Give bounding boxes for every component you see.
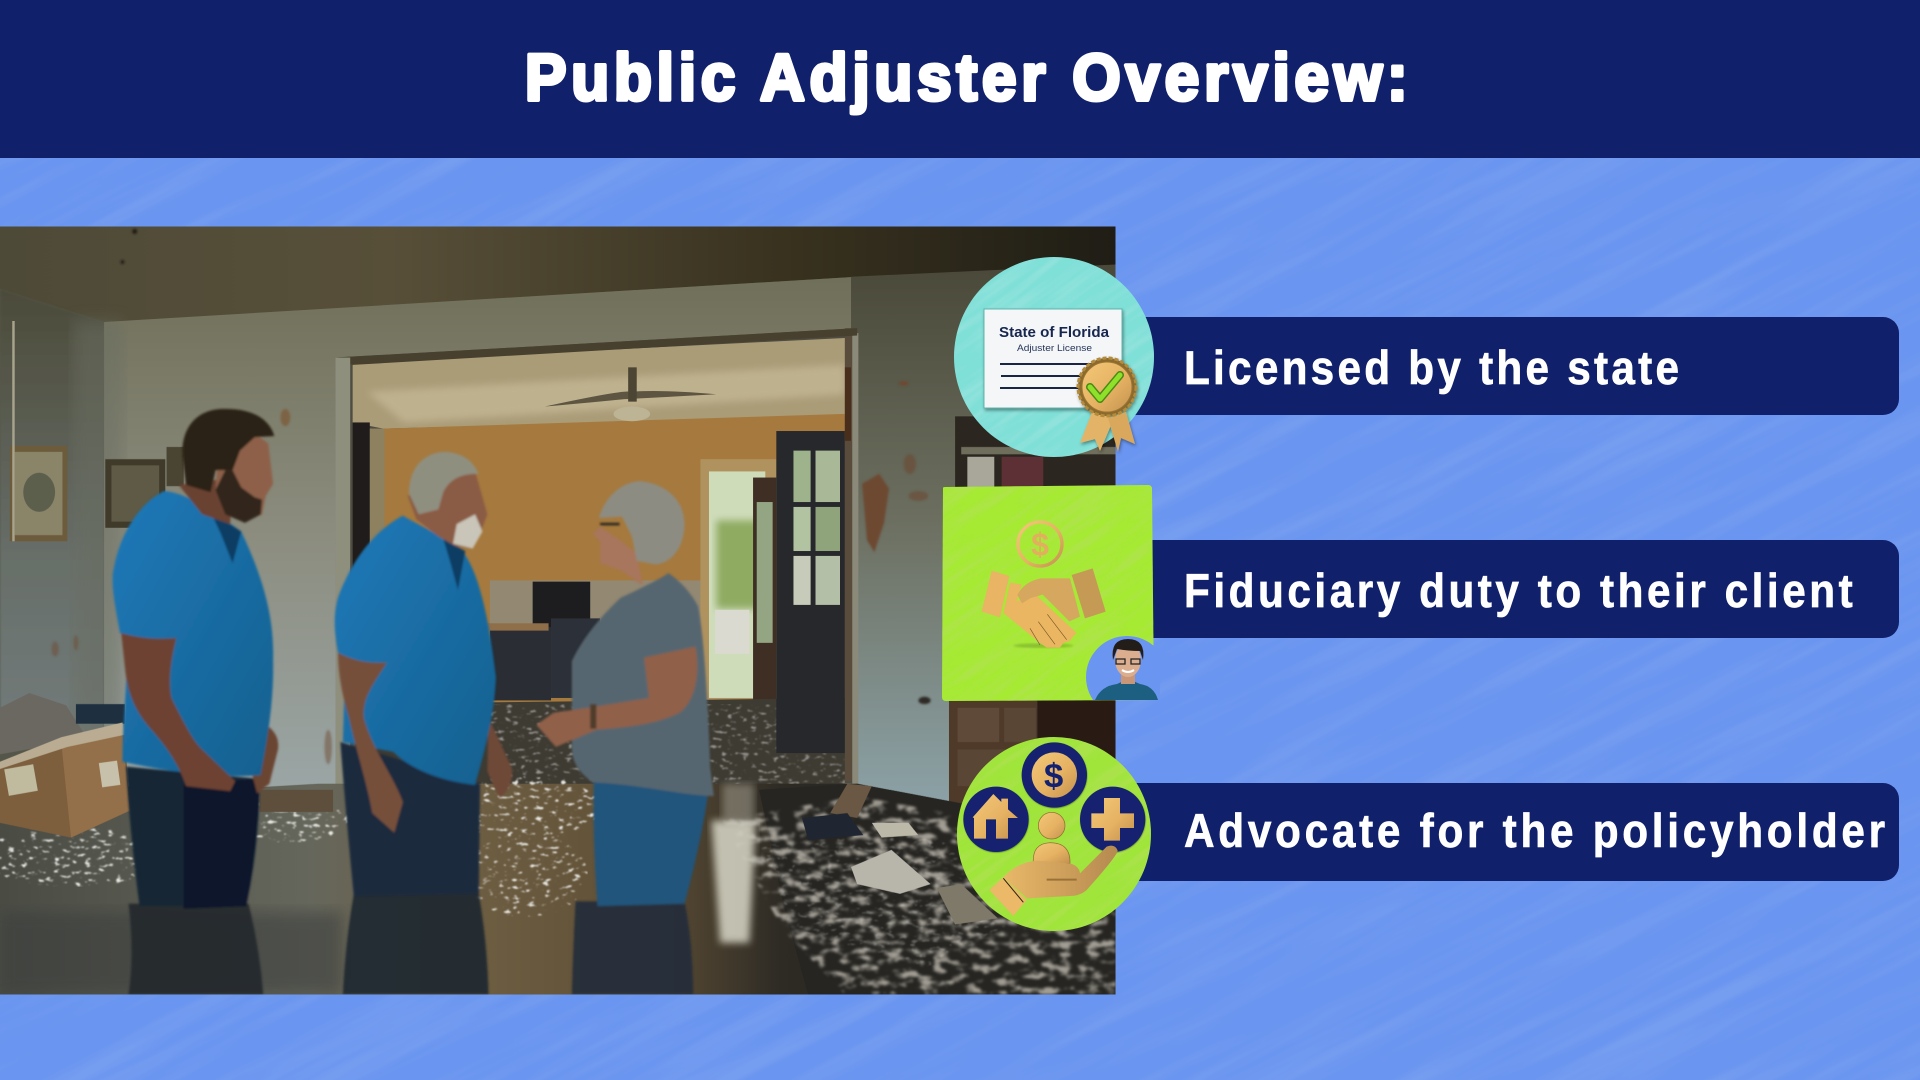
person and open hand	[989, 812, 1118, 916]
shirt	[113, 491, 273, 776]
icon: handshake on green card	[942, 485, 1160, 701]
ceiling fan	[545, 367, 716, 421]
license card: Adjuster License	[1017, 343, 1092, 354]
neck and face	[179, 478, 233, 524]
bar: Fiduciary duty to their client	[1150, 540, 1899, 638]
bookcase and dresser behind icons	[949, 416, 1116, 835]
icon: protecting home, money, health	[957, 737, 1151, 931]
bar: Licensed by the state	[1120, 317, 1899, 415]
debris bands	[0, 828, 136, 887]
shirt	[335, 516, 496, 785]
medical cross badge	[1080, 787, 1145, 852]
license card: State of Florida	[999, 324, 1110, 341]
house badge	[963, 787, 1029, 852]
icon: state license certificate	[954, 257, 1154, 457]
bar: Advocate for the policyholder	[1130, 783, 1899, 881]
bar: Advocate for the policyholder: Advocate for the policyholder	[1184, 806, 1885, 858]
dark door with glass panes	[336, 328, 858, 786]
arm	[338, 653, 403, 833]
advisor portrait	[1086, 636, 1160, 700]
gold seal with ribbons	[1078, 358, 1136, 452]
dollar coin badge	[1022, 742, 1087, 808]
man on left	[113, 409, 278, 994]
flooded floor	[0, 776, 1116, 994]
wall damage patches	[51, 229, 931, 764]
bar: Fiduciary duty to their client: Fiduciary duty to their client	[1184, 566, 1853, 618]
header band	[0, 0, 1920, 158]
handshake	[982, 568, 1106, 648]
arm	[536, 647, 697, 747]
title: Public Adjuster Overview:	[525, 40, 1408, 114]
coin with dollar sign: $	[1031, 526, 1049, 562]
room background	[0, 226, 1116, 801]
arm	[121, 633, 235, 791]
photo: three people in flooded living room	[0, 227, 1116, 994]
bar: Licensed by the state: Licensed by the state	[1184, 343, 1679, 395]
older man in middle	[335, 452, 512, 994]
back room through doorway	[336, 328, 857, 790]
woman with grey hair	[536, 481, 714, 994]
dollar coin badge: $	[1044, 757, 1063, 795]
cardboard box and rubble, left	[0, 693, 333, 838]
license card	[984, 309, 1122, 408]
picture frames	[10, 321, 184, 541]
shirt	[572, 573, 714, 796]
